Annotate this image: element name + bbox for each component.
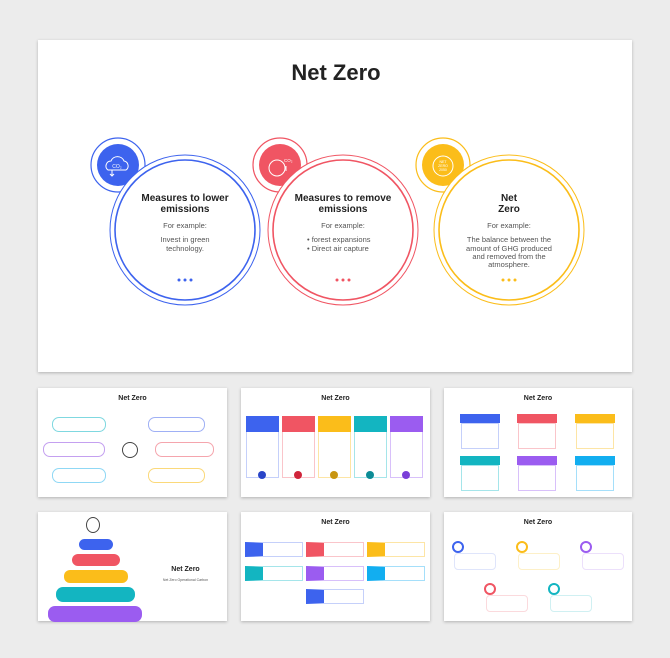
thumbnail 4: pyramid <box>38 512 227 621</box>
panel: net zero <box>416 138 584 305</box>
panel: lower emissions: technology. <box>166 244 204 253</box>
panel: remove emissions: • Direct air capture <box>307 244 369 253</box>
main slide <box>38 40 632 372</box>
thumbnail 1: cycle: Net Zero <box>118 395 147 402</box>
panel: lower emissions: For example: <box>163 221 207 230</box>
panel: net zero: amount of GHG produced <box>466 244 552 253</box>
panel: net zero: The balance between the <box>467 235 551 244</box>
title: Net Zero <box>291 60 381 85</box>
panel: remove emissions: Measures to remove <box>295 193 392 204</box>
thumbnail 4: pyramid: Net Zero Operational Carbon <box>163 578 208 582</box>
icon: net zero 2050: NET <box>440 160 447 164</box>
panel: net zero: atmosphere. <box>488 260 530 269</box>
panel: lower emissions <box>91 138 260 305</box>
icon: net zero 2050: 2050 <box>439 168 447 172</box>
icon: net zero 2050: ZERO <box>438 164 448 168</box>
panel: net zero: Net <box>501 193 518 204</box>
panel: remove emissions <box>253 138 418 305</box>
panel: lower emissions: Measures to lower <box>141 193 229 204</box>
panel: net zero: For example: <box>487 221 531 230</box>
icon: co2 cloud <box>106 157 128 176</box>
panel: net zero: Zero <box>498 204 520 215</box>
icon: globe co2 <box>269 158 293 176</box>
thumbnail 5: numbered boxes: Net Zero <box>321 519 350 526</box>
icon: net zero 2050 <box>433 156 453 176</box>
panel: remove emissions: • forest expansions <box>307 235 371 244</box>
thumbnail 2: columns <box>241 388 430 497</box>
thumbnail 1: cycle <box>38 388 227 497</box>
thumbnail 6: challenges <box>444 512 632 621</box>
panel: lower emissions: emissions <box>161 204 210 215</box>
icon: globe co2: CO₂ <box>284 158 293 163</box>
panel: remove emissions: For example: <box>321 221 365 230</box>
panel: lower emissions: Invest in green <box>160 235 210 244</box>
thumbnail 4: pyramid: Net Zero <box>171 566 200 573</box>
thumbnail 2: columns: Net Zero <box>321 395 350 402</box>
thumbnail 5: numbered boxes <box>241 512 430 621</box>
thumbnail 6: challenges: Net Zero <box>524 519 552 526</box>
panel: net zero: and removed from the <box>472 252 546 261</box>
thumbnail 3: grid <box>444 388 632 497</box>
thumbnail 3: grid: Net Zero <box>524 395 552 402</box>
icon: co2 cloud: CO₂ <box>112 164 122 170</box>
panel: remove emissions: emissions <box>319 204 368 215</box>
